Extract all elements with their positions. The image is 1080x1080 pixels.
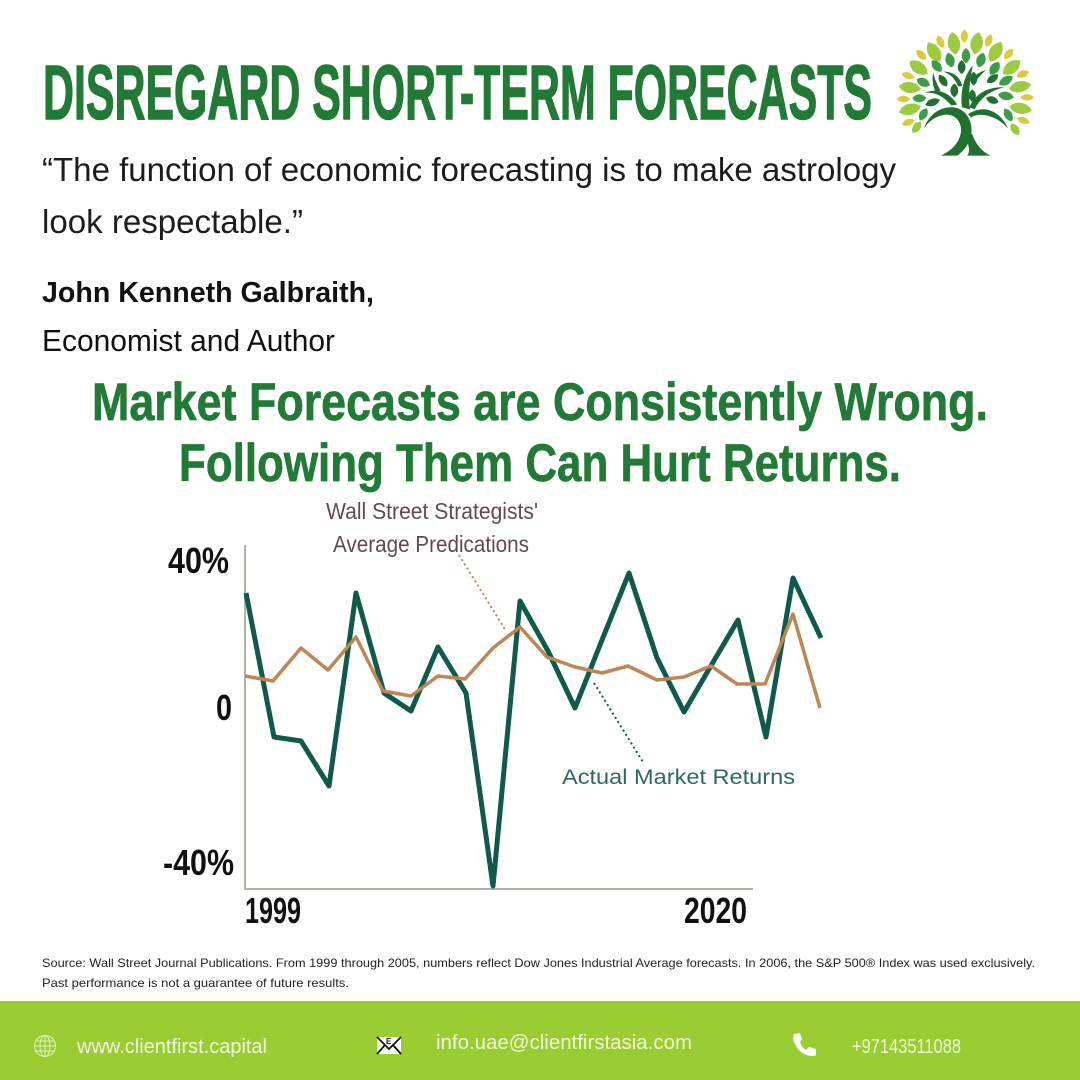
y-axis labels: 0 <box>216 687 232 728</box>
source note: Past performance is not a guarantee of future results. <box>42 976 349 990</box>
footer bar <box>0 1001 1080 1080</box>
forecast label <box>326 498 538 557</box>
phone number: +97143511088 <box>852 1036 961 1058</box>
yellow outer leaves <box>897 30 1034 128</box>
actual returns label: Actual Market Returns <box>562 766 795 789</box>
actual returns pointer <box>594 683 643 762</box>
x-axis labels: 2020 <box>684 890 747 931</box>
trunk and branches <box>924 65 1008 156</box>
y-axis labels <box>163 540 234 883</box>
forecast label: Average Predications <box>333 531 529 557</box>
subheading: Following Them Can Hurt Returns. <box>179 434 901 493</box>
quote attribution: John Kenneth Galbraith, <box>42 277 374 309</box>
y-axis labels: -40% <box>163 842 234 883</box>
email: info.uae@clientfirstasia.com <box>436 1032 692 1054</box>
y-axis labels: 40% <box>168 540 229 581</box>
forecast label: Wall Street Strategists' <box>326 498 538 524</box>
line chart <box>163 498 821 931</box>
quote attribution: Economist and Author <box>42 323 335 358</box>
mid green leaves <box>912 48 1015 123</box>
icon: envelope <box>377 1037 401 1054</box>
source note: Source: Wall Street Journal Publications. From 1999 through 2005, numbers reflect Dow Jones Industrial Average forecasts. In 2006, the S&P 500® Index was used exclusively. <box>42 956 1035 970</box>
light green leaves <box>898 31 1033 137</box>
chart axes <box>245 545 753 889</box>
quote attribution <box>42 277 374 358</box>
quote: “The function of economic forecasting is to make astrology <box>42 151 896 188</box>
subheading <box>92 373 988 493</box>
quote: look respectable.” <box>42 203 303 240</box>
quote <box>42 151 896 240</box>
forecast pointer <box>459 555 506 631</box>
x-axis labels: 1999 <box>245 890 301 931</box>
icon: phone <box>793 1033 816 1056</box>
x-axis labels <box>245 890 747 931</box>
icon: globe <box>34 1036 56 1056</box>
actual market returns line <box>246 573 821 886</box>
source note <box>42 956 1035 990</box>
dark green leaves <box>924 60 1000 108</box>
icon: envelope: E <box>386 1037 392 1046</box>
icon: tree logo <box>897 30 1034 156</box>
website: www.clientfirst.capital <box>76 1036 267 1058</box>
forecast line <box>245 614 820 708</box>
